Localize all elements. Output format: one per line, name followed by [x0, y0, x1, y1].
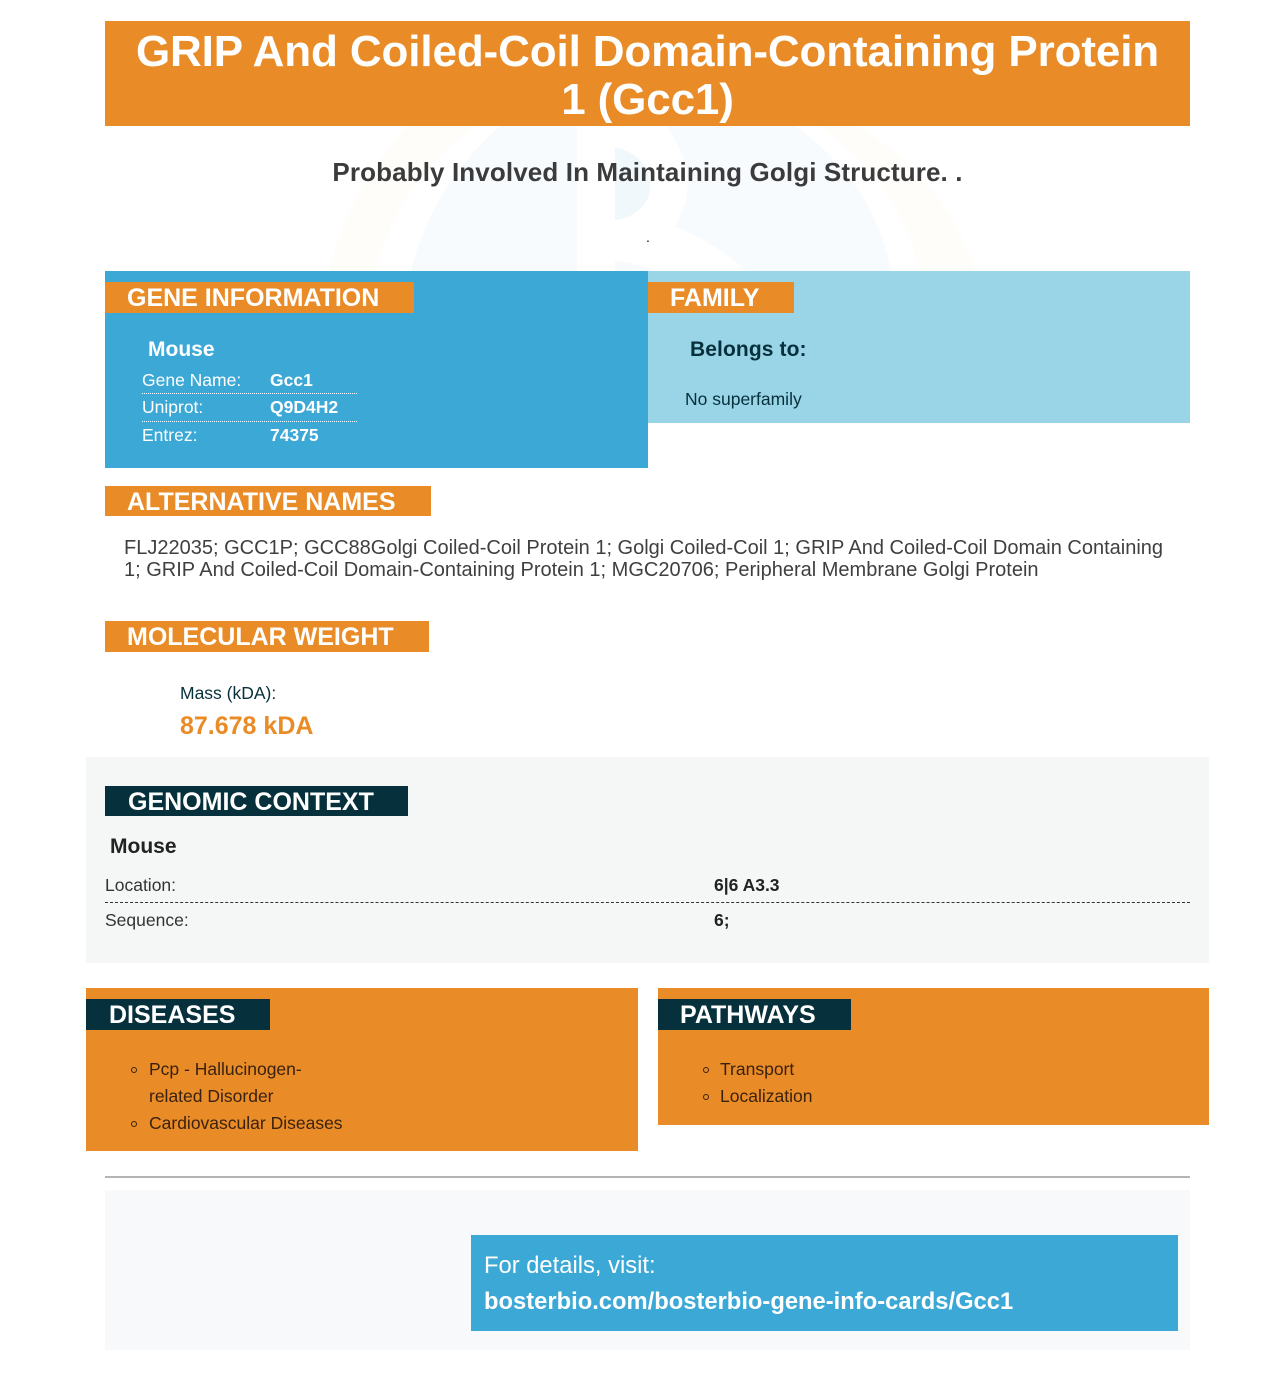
gene info rows: Gcc1 — [270, 370, 313, 390]
panel: genomic context — [86, 757, 1209, 963]
pathways list: Localization — [720, 1086, 812, 1106]
gene info rows: 74375 — [270, 425, 319, 445]
superfamily text: No superfamily — [685, 389, 802, 409]
title banner — [105, 21, 1190, 126]
heading: alternative names: ALTERNATIVE NAMES — [127, 488, 396, 516]
alternative names text — [124, 537, 1163, 581]
location row: Location: — [105, 875, 176, 895]
heading: pathways: PATHWAYS — [680, 1001, 816, 1029]
gene info rows: Gene Name: — [142, 370, 241, 390]
heading: diseases — [86, 999, 270, 1030]
gene info rows: Q9D4H2 — [270, 397, 338, 417]
species: mouse: Mouse — [148, 338, 215, 361]
callout: details link — [471, 1235, 1178, 1331]
pathways list: Transport — [720, 1059, 794, 1079]
heading: family: FAMILY — [670, 284, 759, 312]
mass label: Mass (kDA): — [180, 683, 276, 703]
callout: details link: For details, visit: — [484, 1252, 656, 1279]
heading: molecular weight: MOLECULAR WEIGHT — [127, 623, 394, 651]
alternative names text: 1; GRIP And Coiled-Coil Domain-Containing Protein 1; MGC20706; Peripheral Membrane Golgi Protein — [124, 559, 1039, 581]
gene info rows: Entrez: — [142, 425, 197, 445]
diseases list: related Disorder — [149, 1086, 274, 1106]
title banner: 1 (Gcc1) — [561, 75, 734, 124]
heading: family — [648, 282, 794, 313]
sequence row — [105, 910, 730, 930]
heading: genomic context: GENOMIC CONTEXT — [128, 788, 374, 816]
panel: family — [648, 271, 1190, 423]
gene info rows: Uniprot: — [142, 397, 203, 417]
callout: details link: bosterbio.com/bosterbio-gene-info-cards/Gcc1 — [484, 1288, 1013, 1315]
location row — [105, 876, 1190, 903]
belongs to label: Belongs to: — [690, 338, 807, 361]
gene info rows — [142, 370, 357, 445]
species: mouse: Mouse — [110, 835, 177, 858]
subtitle: Probably Involved In Maintaining Golgi Structure. . — [332, 157, 963, 187]
title banner: GRIP And Coiled-Coil Domain-Containing Protein — [136, 27, 1159, 76]
alternative names text: FLJ22035; GCC1P; GCC88Golgi Coiled-Coil Protein 1; Golgi Coiled-Coil 1; GRIP And Coiled-Coil Domain Containing — [124, 537, 1163, 559]
diseases list — [131, 1059, 343, 1133]
panel: footer — [105, 1190, 1190, 1350]
pathways list — [703, 1059, 812, 1106]
heading: gene information: GENE INFORMATION — [127, 284, 379, 312]
diseases list: Pcp - Hallucinogen- — [149, 1059, 302, 1079]
heading: pathways — [658, 999, 851, 1030]
sequence row: Sequence: — [105, 910, 189, 930]
mass value: 87.678 kDA — [180, 712, 313, 740]
heading: diseases: DISEASES — [109, 1001, 235, 1029]
panel: gene information — [105, 271, 648, 468]
sequence row: 6; — [714, 910, 730, 930]
diseases list: Cardiovascular Diseases — [149, 1113, 343, 1133]
panel: diseases — [86, 988, 638, 1151]
location row: 6|6 A3.3 — [714, 875, 780, 895]
panel: pathways — [658, 988, 1209, 1125]
watermark logo — [615, 147, 650, 220]
dot text: . — [646, 229, 650, 245]
